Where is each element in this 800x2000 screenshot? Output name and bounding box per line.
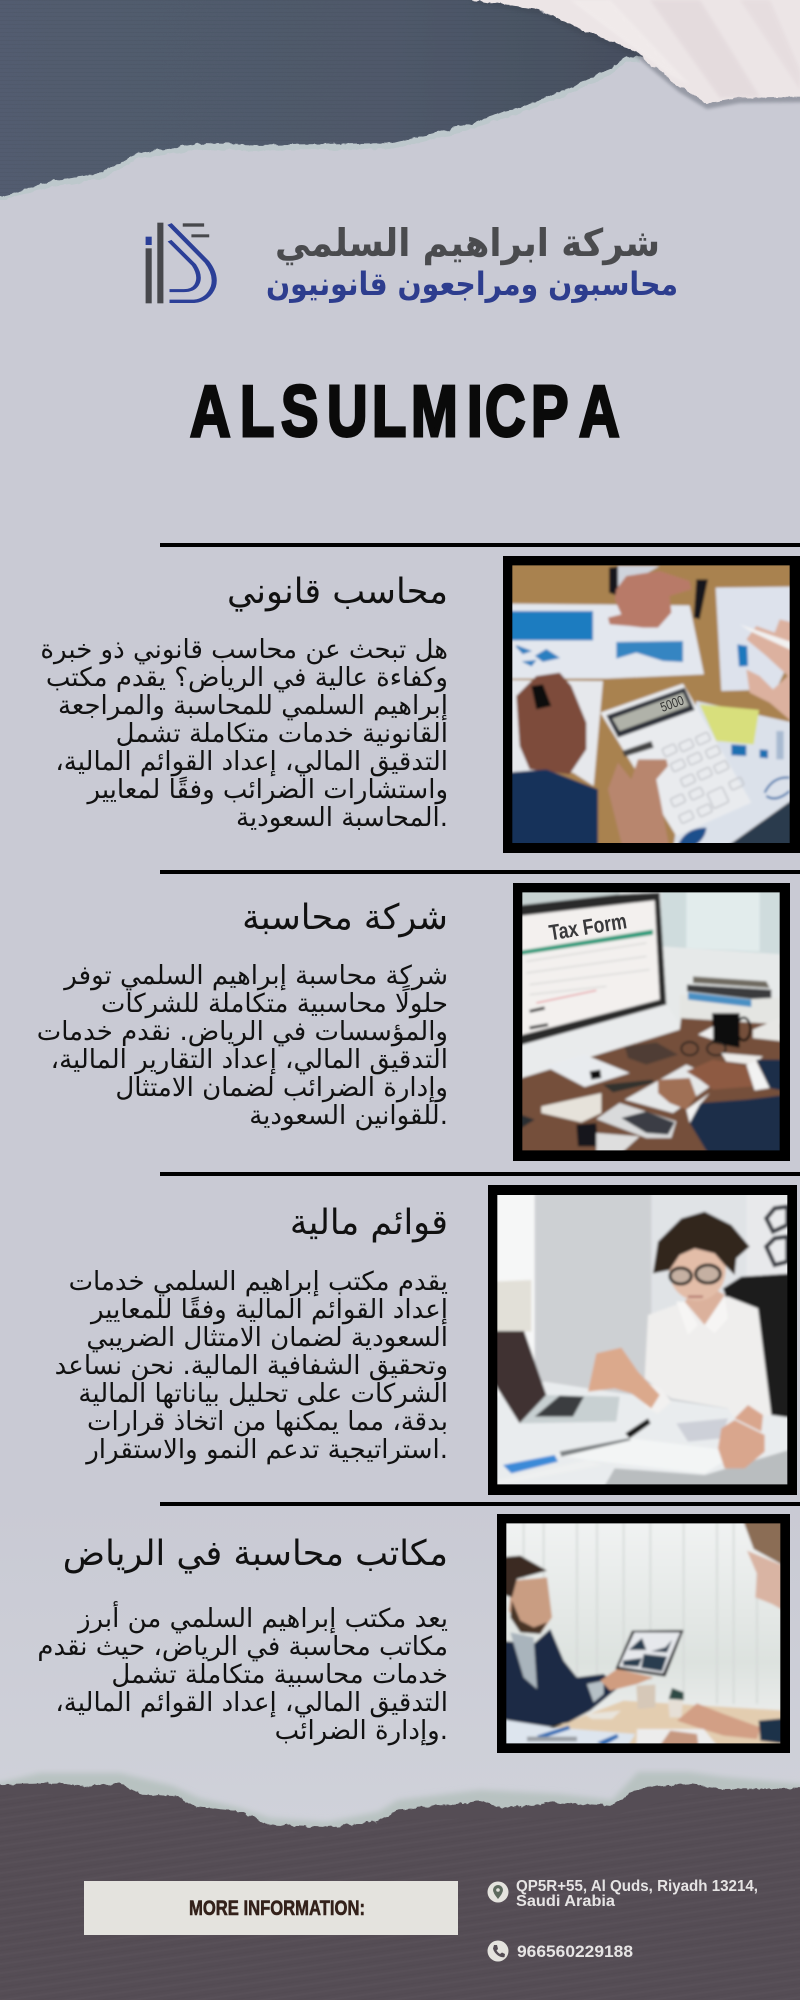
body text: حلولًا محاسبية متكاملة للشركات	[101, 989, 448, 1019]
body text: والمؤسسات في الرياض. نقدم خدمات	[37, 1017, 448, 1047]
body text: شركة محاسبة إبراهيم السلمي توفر	[64, 961, 448, 991]
body text: خدمات محاسبية متكاملة تشمل	[111, 1660, 448, 1690]
address text	[516, 1878, 758, 1910]
photo: tax form on monitor: Tax Form	[547, 908, 628, 945]
photo: two colleagues with tablet	[497, 1514, 790, 1753]
background torn paper header	[0, 0, 800, 200]
body text: إبراهيم السلمي للمحاسبة والمراجعة	[58, 691, 448, 721]
body text: القانونية خدمات متكاملة تشمل	[116, 719, 448, 749]
body text: المحاسبة السعودية.	[236, 803, 448, 833]
logo arabic text: شركة ابراهيم السلمي	[275, 221, 660, 266]
body text: للقوانين السعودية.	[249, 1101, 448, 1131]
body text: التدقيق المالي، إعداد القوائم المالية،	[55, 1688, 448, 1718]
body text: وإدارة الضرائب لضمان الامتثال	[115, 1073, 448, 1103]
heading: شركة محاسبة	[242, 898, 448, 938]
body text: التدقيق المالي، إعداد التقارير المالية،	[51, 1045, 448, 1075]
address text: QP5R+55, Al Quds, Riyadh 13214,	[516, 1878, 758, 1895]
logo	[146, 221, 678, 304]
more information box: MORE INFORMATION:	[189, 1897, 365, 1920]
body text: التدقيق المالي، إعداد القوائم المالية،	[55, 747, 448, 777]
photo: woman at desk	[488, 1185, 797, 1495]
body text: السعودية لضمان الامتثال الضريبي	[86, 1323, 448, 1353]
body text: يعد مكتب إبراهيم السلمي من أبرز	[78, 1604, 448, 1634]
body text	[40, 635, 448, 833]
heading: محاسب قانوني	[227, 572, 448, 612]
panel: financial statements	[55, 1185, 797, 1495]
footer torn paper background	[0, 1771, 800, 2000]
heading: مكاتب محاسبة في الرياض	[63, 1534, 448, 1574]
panel: certified accountant	[40, 556, 800, 853]
logo mark	[146, 222, 217, 304]
more information box	[84, 1881, 458, 1935]
icon: location pin	[488, 1882, 508, 1902]
body text: وإدارة الضرائب.	[275, 1716, 448, 1746]
body text: هل تبحث عن محاسب قانوني ذو خبرة	[40, 635, 448, 665]
body text: مكاتب محاسبة في الرياض، حيث نقدم	[37, 1632, 448, 1662]
body text: يقدم مكتب إبراهيم السلمي خدمات	[69, 1267, 448, 1297]
photo: tax form on monitor	[513, 883, 790, 1161]
logo arabic text	[266, 221, 678, 303]
photo: calculator and charts	[503, 556, 800, 853]
body text: استراتيجية تدعم النمو والاستقرار.	[86, 1435, 448, 1465]
heading: قوائم مالية	[290, 1203, 448, 1243]
address text: Saudi Arabia	[516, 1893, 615, 1910]
icon: phone	[488, 1940, 508, 1962]
body text: وكفاءة عالية في الرياض؟ يقدم مكتب	[46, 663, 448, 693]
title: ALSULMICPA	[190, 371, 620, 450]
photo: calculator and charts: 5000	[658, 693, 686, 715]
body text: واستشارات الضرائب وفقًا لمعايير	[87, 775, 448, 805]
body text: وتحقيق الشفافية المالية. نحن نساعد	[55, 1351, 448, 1381]
phone number: 966560229188	[517, 1943, 633, 1961]
panel: accounting firm	[37, 883, 790, 1161]
body text	[37, 961, 448, 1131]
body text: إعداد القوائم المالية وفقًا للمعايير	[91, 1295, 448, 1325]
body text	[55, 1267, 448, 1465]
panel: accounting offices in Riyadh	[37, 1514, 790, 1753]
body text	[37, 1601, 448, 1746]
body text: بدقة، مما يمكنها من اتخاذ قرارات	[87, 1407, 448, 1437]
body text: الشركات على تحليل بياناتها المالية	[78, 1379, 448, 1409]
